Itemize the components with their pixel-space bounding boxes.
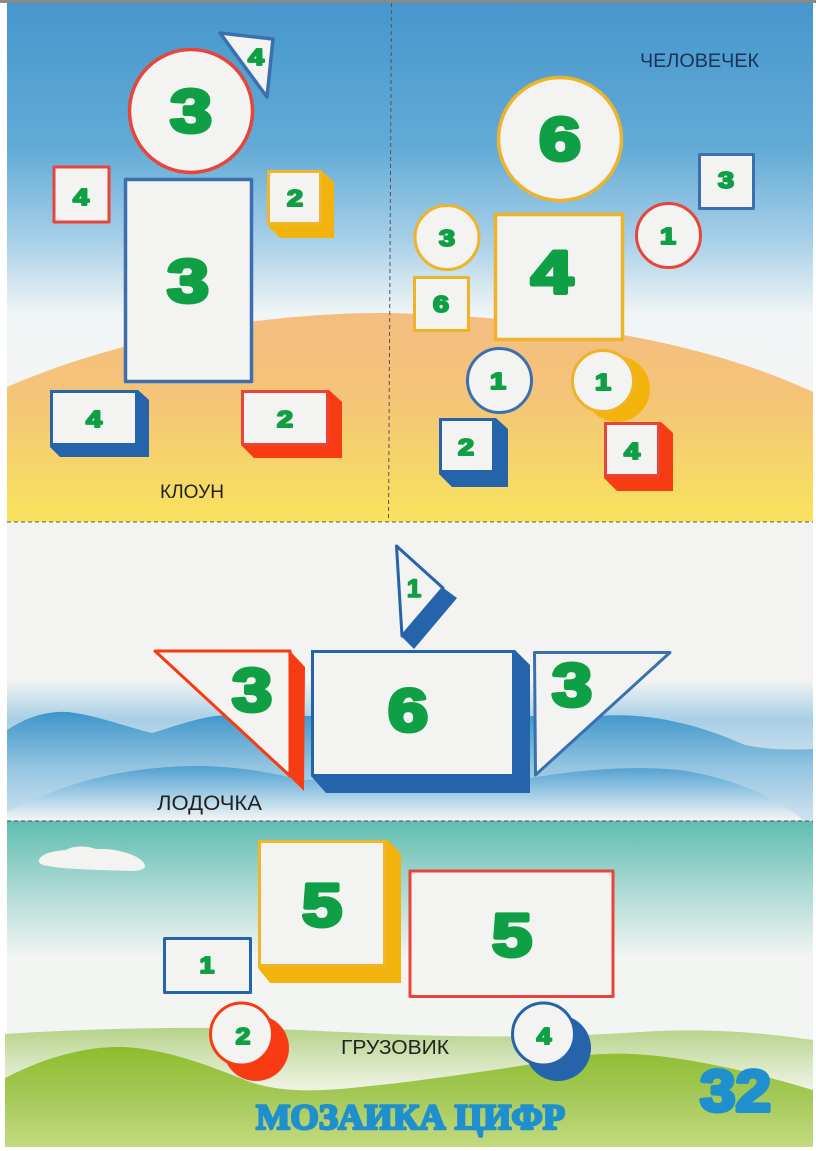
clown left hand square [54,167,109,222]
panel: boat background [7,523,813,821]
panel: boat [155,546,670,815]
back wheel: 4 [537,1025,552,1050]
truck body rectangle [410,871,613,996]
blue square: 3 [718,167,734,193]
hull block [311,650,530,793]
red block: 4 [624,438,641,464]
sail: 1 [407,576,421,603]
truck front square: 1 [200,954,215,979]
sky [7,3,813,522]
panel: truck background [5,821,813,1147]
panel: clown [50,33,342,503]
truck front square [164,938,250,992]
truck cab block [258,840,401,983]
panel: little man [414,51,759,491]
yellow circle with shadow [572,350,650,422]
front wheel: 2 [236,1025,250,1050]
left yellow square: 6 [433,291,449,317]
page number: 32 [700,1059,771,1124]
blue block: 2 [458,434,474,460]
clown right hand block: 2 [287,185,303,211]
left yellow circle [415,206,479,270]
left yellow square [414,278,468,330]
clown hat triangle: 4 [248,44,265,70]
water band [7,680,813,821]
clown left foot block [50,390,149,457]
label: boat: ЛОДОЧКА [157,792,262,815]
back waves [7,712,813,821]
left red triangle: 3 [232,658,272,725]
sky [7,821,813,1147]
clown body rectangle: 3 [167,249,209,315]
right blue triangle [534,652,670,775]
front wheel [210,1003,289,1081]
panel: clown and little man background [7,3,813,522]
panel: truck [164,840,613,1081]
label: clown: КЛОУН [160,482,224,503]
front hill [5,1047,813,1147]
clown head circle [130,50,252,172]
blue square [700,154,754,208]
truck cab block: 5 [302,873,342,940]
sail [396,546,457,649]
clown left foot block: 4 [86,406,103,432]
label: little man: ЧЕЛОВЕЧЕК [640,51,759,72]
head circle: 6 [539,107,581,173]
back wheel [512,1003,591,1081]
yellow circle with shadow: 1 [595,369,611,395]
title: МОЗАИКА ЦИФР [256,1097,565,1137]
blue circle [468,348,532,412]
head circle [498,78,622,200]
clown right hand block [268,171,334,238]
hull block: 6 [388,678,428,745]
truck body rectangle: 5 [492,903,532,970]
red circle: 1 [660,223,676,249]
clown head circle: 3 [170,79,212,145]
cloud [39,846,145,871]
clown right foot block: 2 [277,406,293,432]
paper [7,523,813,821]
clown left hand square: 4 [73,184,90,210]
left yellow circle: 3 [439,225,455,251]
clown body rectangle [126,180,252,382]
front waves [7,766,803,820]
label: truck: ГРУЗОВИК [341,1037,449,1059]
body square: 4 [531,240,573,306]
blue block [439,418,508,487]
red block [604,422,673,491]
clown hat triangle [220,33,273,97]
right blue triangle: 3 [552,653,592,720]
left red triangle [155,651,305,791]
clown right foot block [241,390,342,458]
red circle [636,204,700,268]
back hill [5,1028,813,1147]
page top edge [0,0,816,3]
body square [496,214,622,340]
sand hill [7,313,813,522]
blue circle: 1 [490,368,506,394]
